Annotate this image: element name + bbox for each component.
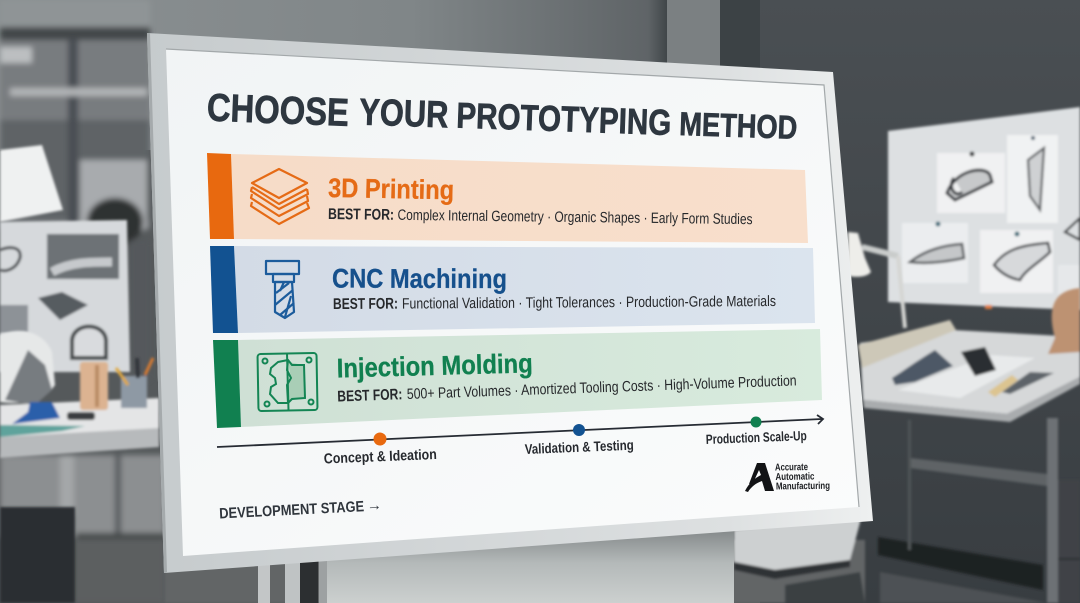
stage label: Concept & Ideation: Concept & Ideation — [324, 447, 437, 467]
logo text: Accurate — [775, 462, 808, 473]
lamp shade on left — [0, 145, 63, 222]
panel background — [238, 329, 822, 427]
left window wall — [0, 0, 166, 603]
floor and lower right cabinet — [165, 515, 865, 603]
title: CHOOSE YOUR PROTOTYPING METHOD: CHOOSE — [206, 87, 350, 135]
blue accent bar — [210, 246, 238, 333]
panel background — [231, 154, 808, 243]
sign frame — [147, 33, 873, 573]
logo mark — [745, 463, 774, 492]
title: CHOOSE YOUR PROTOTYPING METHOD: YOUR — [359, 91, 449, 135]
logo text: Automatic — [775, 471, 815, 483]
timeline: development stages — [217, 415, 823, 467]
logo text: Manufacturing — [776, 481, 830, 492]
sign pedestal — [327, 530, 734, 603]
right dark wall — [760, 0, 1080, 603]
structural pillar — [667, 0, 720, 80]
icon: stacked layers — [251, 169, 309, 224]
panel background — [234, 246, 815, 333]
panel: 3D Printing — [207, 153, 808, 243]
best-for line: BEST FOR: — [333, 296, 398, 313]
stage label: Production Scale-Up: Production Scale-Up — [706, 428, 807, 447]
logo text — [775, 462, 830, 492]
left pinboard with sketches — [0, 220, 130, 372]
stage marker: validation — [573, 424, 585, 436]
panel: Injection Molding — [213, 329, 822, 428]
heading: Injection Molding: Injection Molding — [336, 348, 533, 383]
title: CHOOSE YOUR PROTOTYPING METHOD — [206, 87, 798, 146]
panel: CNC Machining — [210, 246, 815, 333]
table legs and drawers — [878, 418, 1080, 603]
best-for line: 500+ Part Volumes · Amortized Tooling Costs · High-Volume Production — [407, 372, 797, 403]
title: CHOOSE YOUR PROTOTYPING METHOD: METHOD — [679, 105, 798, 146]
right whiteboard with sketches — [888, 107, 1080, 310]
left desk with objects — [0, 331, 159, 458]
heading: 3D Printing: 3D Printing — [328, 173, 454, 205]
axis label: DEVELOPMENT STAGE: DEVELOPMENT STAGE — [219, 498, 365, 522]
stage marker: production — [750, 416, 762, 428]
sign stand legs — [258, 555, 327, 603]
orange accent bar — [207, 153, 234, 239]
stage label: Validation & Testing: Validation & Testing — [524, 437, 634, 457]
stage marker: concept — [374, 432, 386, 446]
icon: mold — [258, 353, 317, 411]
best-for line — [328, 206, 753, 228]
best-for line: BEST FOR: — [328, 206, 394, 224]
best-for line: Functional Validation · Tight Tolerances · Production-Grade Materials — [402, 293, 776, 313]
green accent bar — [213, 340, 241, 428]
wall above the sign — [0, 0, 1080, 150]
axis label: DEVELOPMENT STAGE: → — [366, 497, 382, 514]
best-for line: Complex Internal Geometry · Organic Shapes · Early Form Studies — [397, 207, 753, 228]
desk lamp — [848, 232, 905, 328]
dark cabinet lower left — [0, 507, 75, 603]
best-for line — [337, 372, 797, 405]
timeline arrow — [217, 415, 823, 447]
icon: end mill — [266, 261, 299, 318]
best-for line: BEST FOR: — [337, 386, 403, 405]
title: CHOOSE YOUR PROTOTYPING METHOD: PROTOTYPING — [456, 95, 672, 143]
logo: Accurate Automatic Manufacturing — [745, 462, 830, 492]
heading: CNC Machining: CNC Machining — [332, 264, 507, 294]
best-for line — [333, 293, 776, 313]
right drafting table — [858, 288, 1080, 422]
